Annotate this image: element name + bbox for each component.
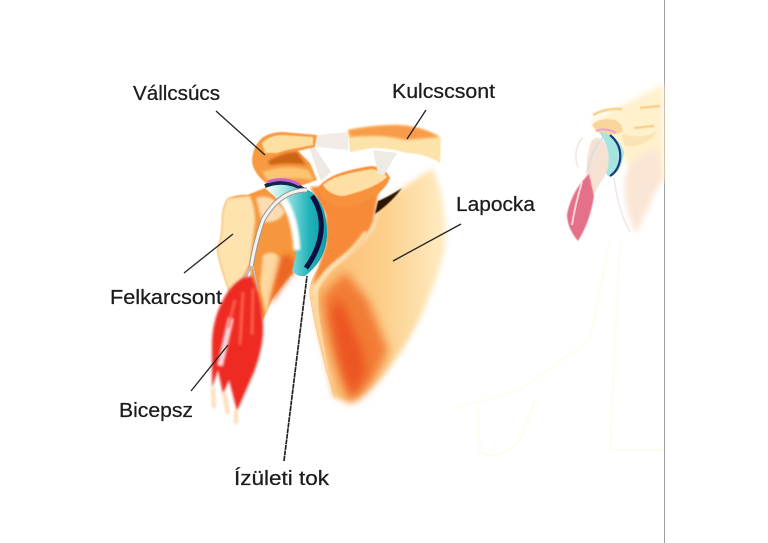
scapula neck [310, 183, 380, 296]
clavicle [348, 125, 441, 163]
biceps muscle [212, 276, 263, 424]
ligaments [309, 132, 397, 181]
coracoid process [318, 166, 402, 214]
label: Kulcscsont: Kulcscsont [392, 81, 495, 103]
pointer: Vállcsúcs [216, 111, 265, 155]
joint capsule cartilage [265, 180, 327, 276]
faded secondary shoulder illustration [456, 84, 664, 455]
label: Bicepsz: Bicepsz [119, 400, 193, 422]
label: Lapocka: Lapocka [456, 194, 536, 216]
pointer: Lapocka [393, 224, 461, 261]
pointer: Kulcscsont [407, 110, 426, 139]
pointer: Ízületi tok [284, 276, 307, 461]
label: Vállcsúcs: Vállcsúcs [133, 83, 220, 105]
scapula [310, 168, 445, 403]
pointer: Felkarcsont [184, 234, 233, 273]
biceps tendon [233, 190, 307, 293]
pointer: Bicepsz [191, 345, 228, 391]
label: Ízületi tok: Ízületi tok [234, 467, 330, 490]
label: Felkarcsont: Felkarcsont [110, 287, 222, 309]
acromion [252, 132, 317, 186]
page edge line [664, 0, 665, 543]
humerus [217, 188, 297, 320]
